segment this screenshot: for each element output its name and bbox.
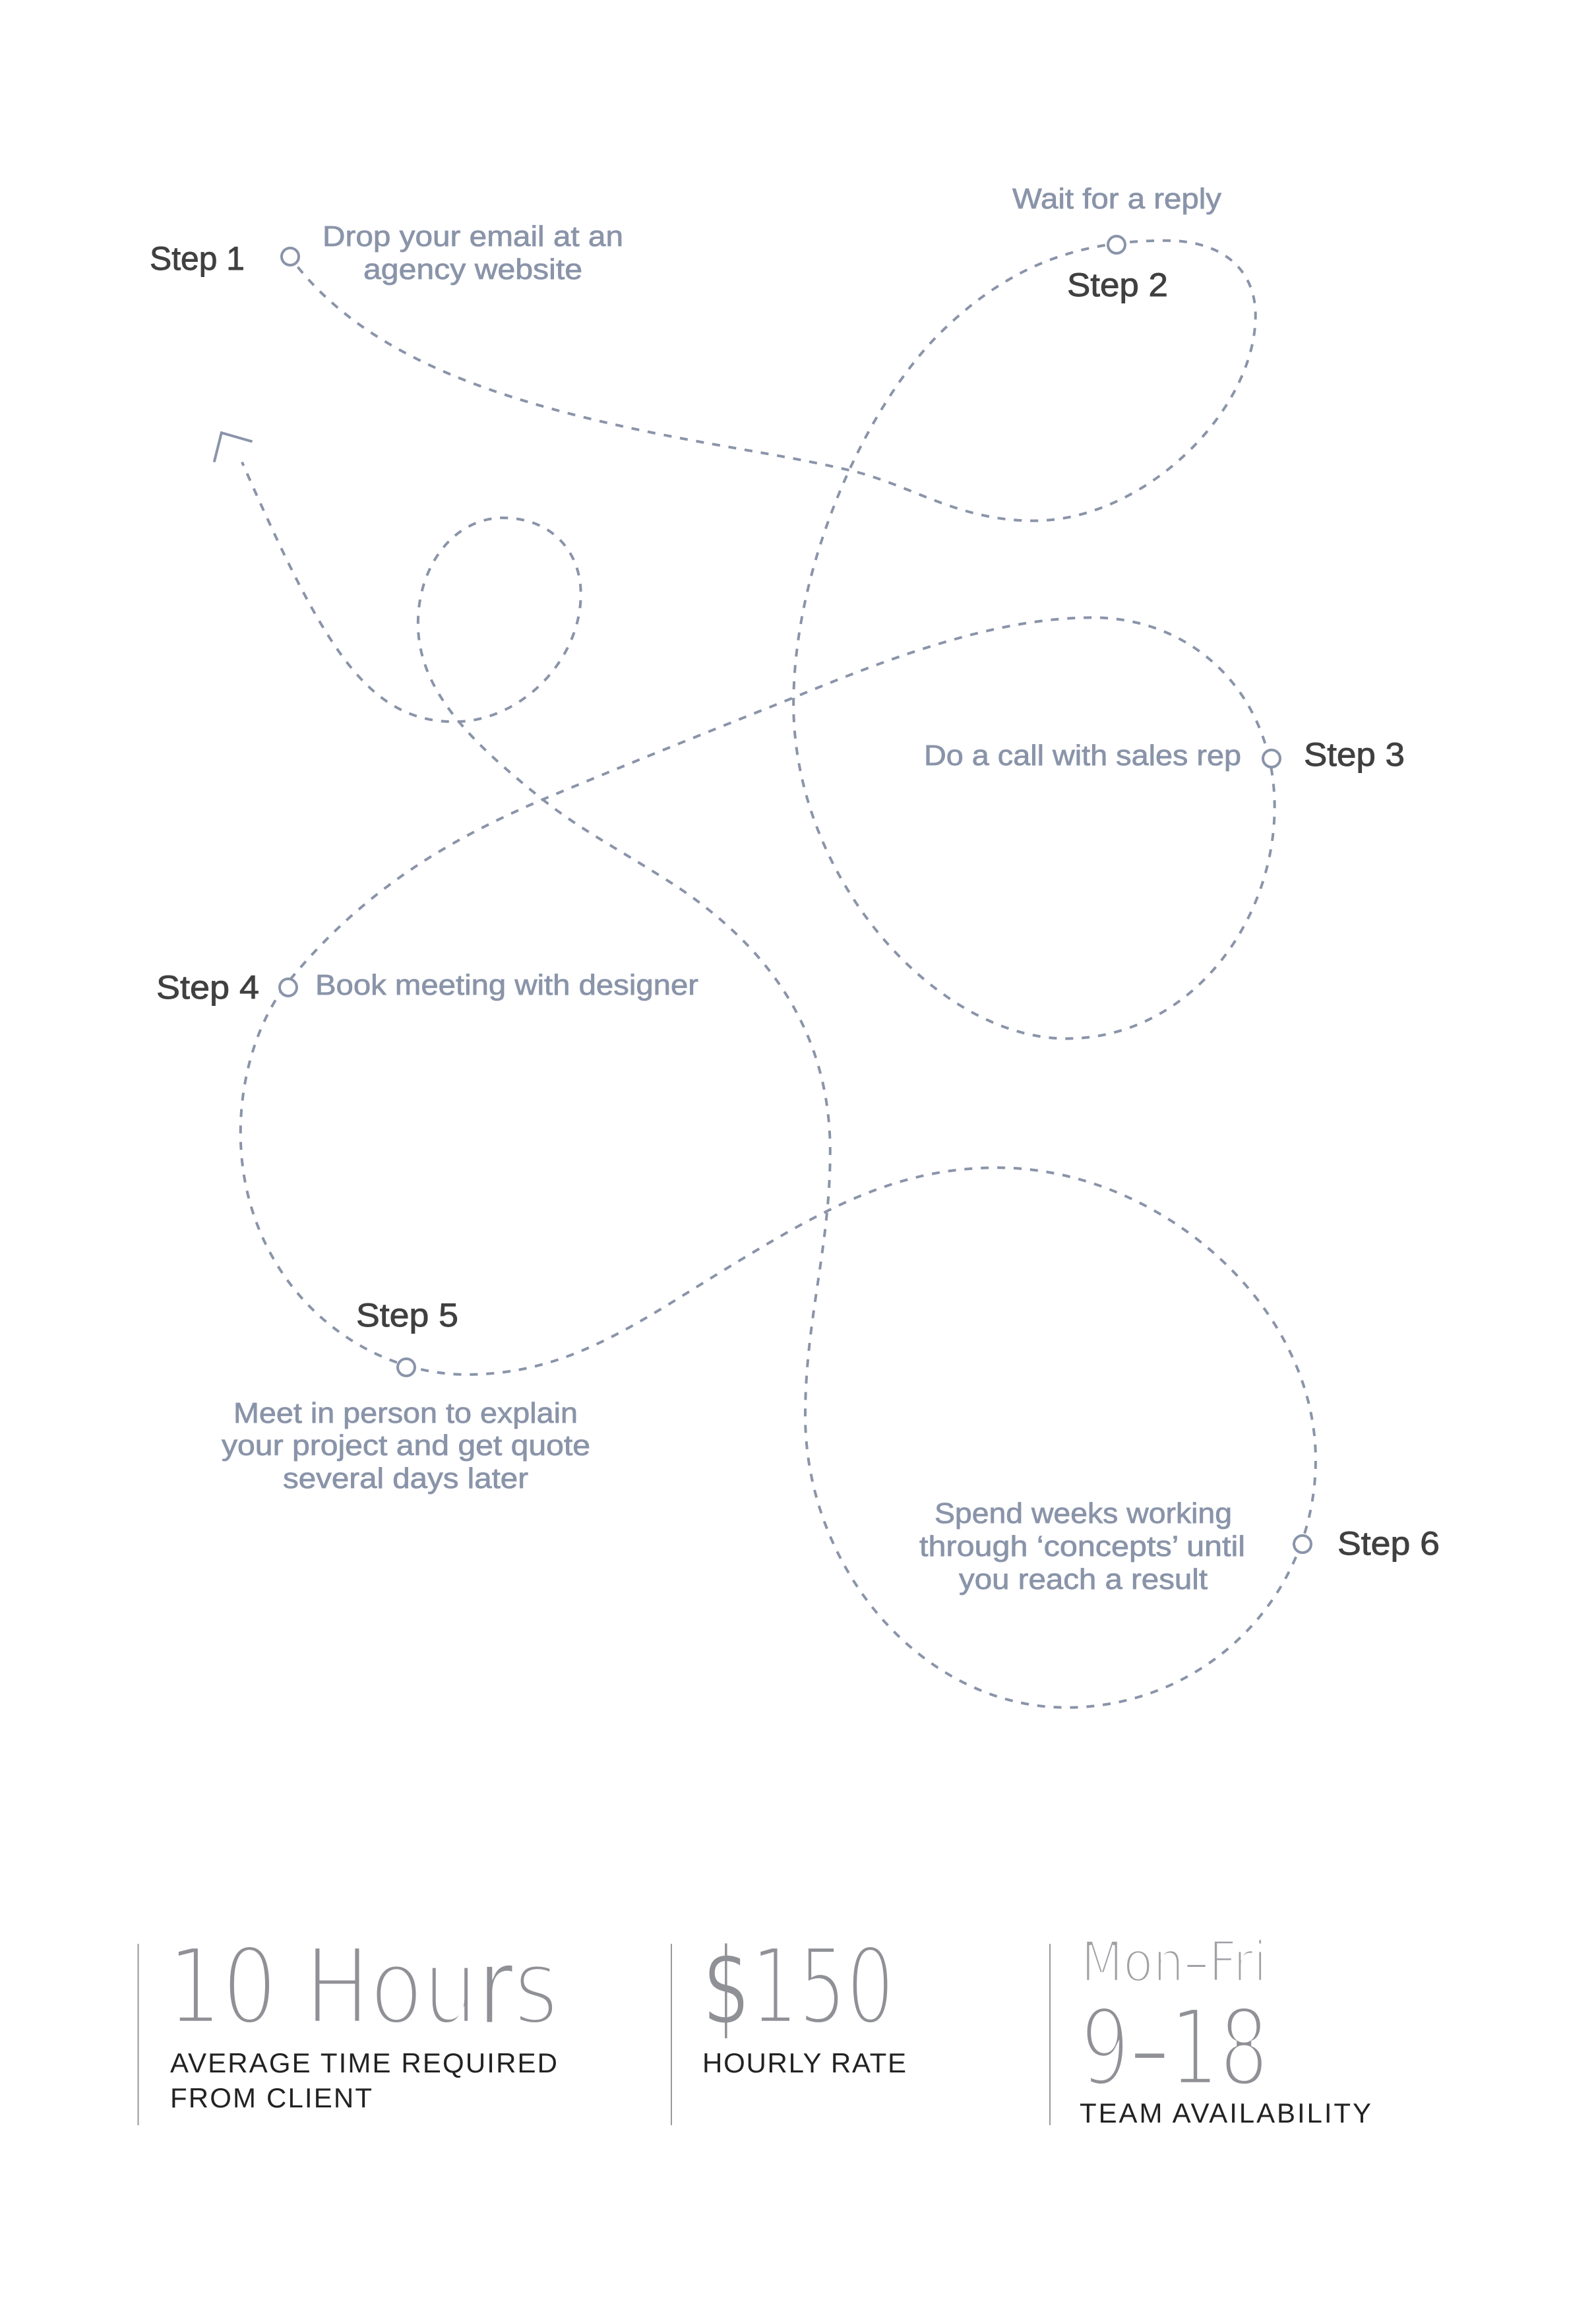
days: Mon–Fri bbox=[1081, 1929, 1267, 1995]
step 3 bbox=[924, 736, 1405, 773]
stat caption bbox=[170, 2047, 557, 2113]
divider bbox=[1049, 1944, 1051, 2125]
step 1 label: Step 1 bbox=[150, 240, 245, 277]
divider bbox=[137, 1944, 138, 2125]
stat caption: FROM CLIENT bbox=[170, 2082, 372, 2113]
step 4 label: Step 4 bbox=[156, 969, 259, 1006]
step 4 description: Book meeting with designer bbox=[315, 969, 698, 1001]
stat: rate bbox=[671, 1925, 906, 2125]
stat: hours bbox=[138, 1925, 559, 2125]
step 5 bbox=[222, 1297, 590, 1495]
dashed path bbox=[241, 241, 1316, 1708]
stat caption: TEAM AVAILABILITY bbox=[1080, 2098, 1371, 2129]
marker step 1 bbox=[282, 248, 299, 265]
step 6 bbox=[919, 1497, 1440, 1596]
step 6 label: Step 6 bbox=[1337, 1525, 1440, 1562]
step 6 description: you reach a result bbox=[959, 1563, 1208, 1596]
marker step 6 bbox=[1294, 1536, 1311, 1553]
step 2 description: Wait for a reply bbox=[1012, 183, 1221, 215]
step 5 label: Step 5 bbox=[356, 1297, 458, 1334]
step 5 description bbox=[222, 1397, 590, 1495]
step 1 description bbox=[322, 220, 623, 286]
step 3 description: Do a call with sales rep bbox=[924, 739, 1241, 772]
step markers bbox=[280, 236, 1311, 1553]
step 5 description: several days later bbox=[283, 1462, 528, 1495]
step 6 description: through ‘concepts’ until bbox=[919, 1530, 1245, 1563]
step 1 description: Drop your email at an bbox=[322, 220, 623, 253]
marker step 5 bbox=[398, 1359, 415, 1376]
step 2 label: Step 2 bbox=[1067, 266, 1168, 303]
dashed journey path with arrow bbox=[214, 241, 1316, 1708]
marker step 2 bbox=[1108, 236, 1125, 253]
arrowhead bbox=[214, 433, 253, 462]
stat caption: AVERAGE TIME REQUIRED bbox=[170, 2047, 557, 2078]
step 5 description: your project and get quote bbox=[222, 1429, 590, 1462]
step 4 bbox=[156, 969, 698, 1006]
marker step 3 bbox=[1263, 750, 1280, 767]
step 6 description bbox=[919, 1497, 1245, 1596]
hours: 9–18 bbox=[1080, 1987, 1269, 2111]
step 1 bbox=[150, 220, 623, 286]
step 3 label: Step 3 bbox=[1304, 736, 1405, 773]
stat value: 10 Hours bbox=[167, 1925, 559, 2049]
step 6 description: Spend weeks working bbox=[935, 1497, 1232, 1530]
stat value: $150 bbox=[702, 1925, 894, 2049]
step 1 description: agency website bbox=[363, 253, 582, 286]
stat caption: HOURLY RATE bbox=[702, 2047, 906, 2078]
step 2 bbox=[1012, 183, 1221, 303]
stat: availability bbox=[1050, 1929, 1371, 2129]
divider bbox=[671, 1944, 672, 2125]
marker step 4 bbox=[280, 979, 297, 996]
step 5 description: Meet in person to explain bbox=[233, 1397, 578, 1429]
